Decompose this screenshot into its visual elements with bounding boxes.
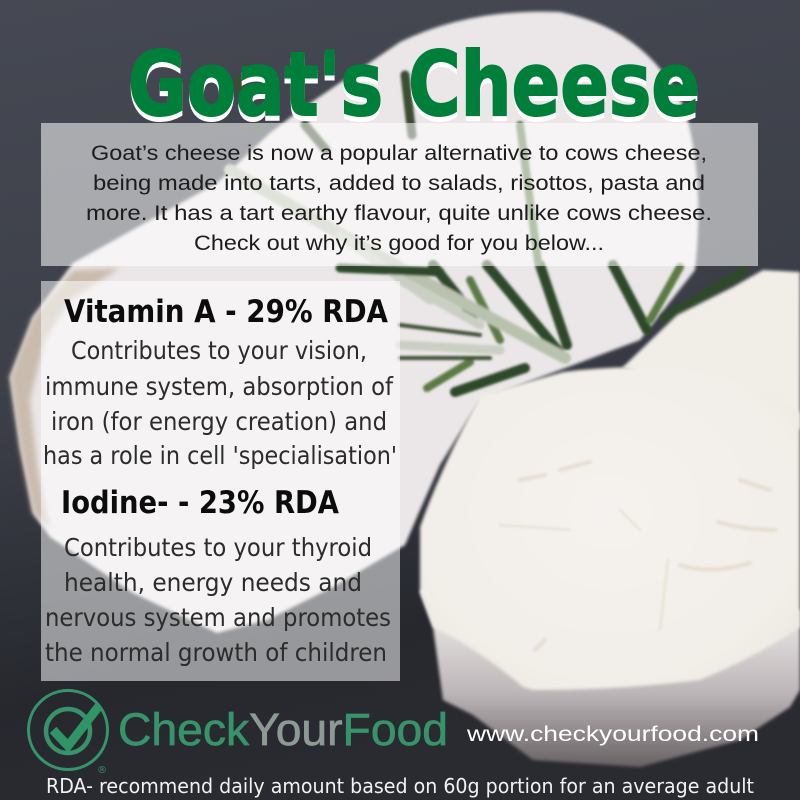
heading: Iodine: Iodine- - 23% RDA (61, 485, 339, 521)
heading: Vitamin A: Vitamin A - 29% RDA (64, 294, 388, 330)
right cheese slice (622, 270, 800, 430)
RDA footnote: RDA- recommend daily amount based on 60g portion for an average adult (46, 774, 754, 798)
cheese log (10, 12, 698, 633)
intro text: being made into tarts, added to salads, risottos, pasta and (93, 172, 705, 195)
Vitamin A description: Contributes to your vision, (71, 336, 367, 365)
Vitamin A description: immune system, absorption of (45, 372, 394, 401)
panel: introduction (41, 123, 758, 266)
Iodine description (45, 533, 391, 667)
icon: check mark in circles: ® (97, 765, 107, 776)
log end rind (10, 268, 120, 530)
panel: nutrients (41, 281, 400, 681)
icon: check mark in circles (28, 690, 108, 776)
Vitamin A description: iron (for energy creation) and (51, 407, 387, 436)
intro text: Goat’s cheese is now a popular alternative to cows cheese, (91, 142, 707, 165)
main cheese slice rim (420, 590, 800, 767)
Iodine description: health, energy needs and (64, 568, 362, 597)
intro text: Check out why it’s good for you below... (194, 232, 604, 255)
Iodine description: nervous system and promotes (45, 603, 391, 632)
cheese surface cracks (500, 462, 775, 650)
Vitamin A description (43, 336, 397, 470)
main cheese slice face (420, 367, 800, 690)
website url: www.checkyourfood.com (466, 723, 759, 746)
Vitamin A description: has a role in cell 'specialisation' (43, 441, 397, 470)
Iodine description: Contributes to your thyroid (64, 533, 372, 562)
logo: CheckYourFood (28, 690, 448, 776)
rosemary sprig (230, 75, 743, 392)
Iodine description: the normal growth of children (45, 638, 387, 667)
intro text (86, 142, 712, 255)
intro text: more. It has a tart earthy flavour, quite unlike cows cheese. (86, 202, 712, 225)
wordmark: CheckYourFood (118, 704, 448, 755)
